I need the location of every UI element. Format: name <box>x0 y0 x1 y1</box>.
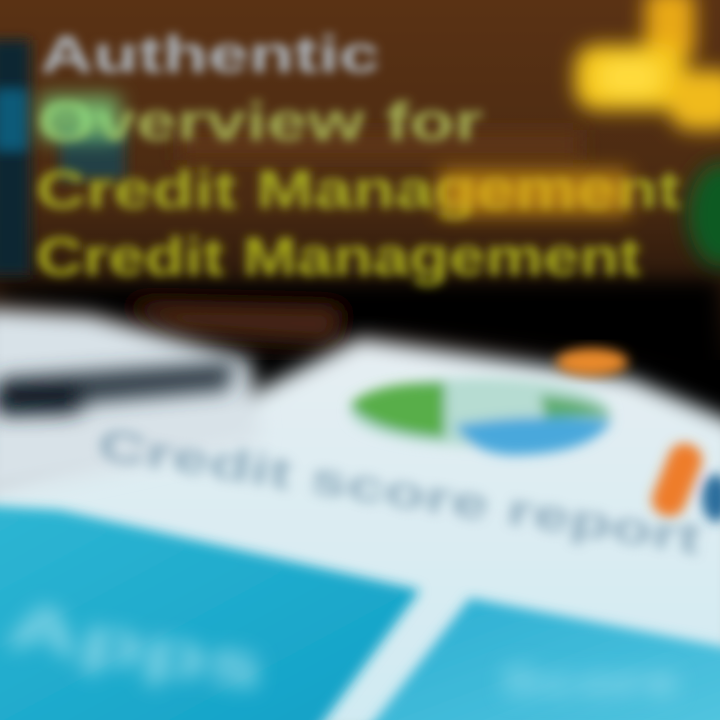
background: wooden desk <box>0 0 720 360</box>
heading line 3: Credit Management <box>36 160 681 220</box>
icon: yellow glow top right <box>575 0 720 130</box>
icon: orange and blue marker <box>647 438 720 522</box>
text block: lower-left cell label: Apps <box>2 591 270 704</box>
left blue edge <box>0 40 125 275</box>
text block: lower-right cell label: Score <box>500 660 680 704</box>
panel: main white document <box>0 338 720 720</box>
heading line 2: Overview for <box>38 92 483 152</box>
heading line 4: Credit Management <box>36 227 641 287</box>
dark band beneath heading <box>0 280 720 385</box>
heading line 1: Authentic <box>40 26 380 84</box>
orange tab <box>556 348 628 376</box>
heading colour accents <box>40 95 630 215</box>
title: blurred heading <box>36 26 681 287</box>
icon: green object right edge <box>688 163 720 267</box>
chart: green and blue pie <box>350 378 612 455</box>
paper: back-left document <box>0 308 260 500</box>
text block: blurred document label: Credit score report <box>94 420 705 564</box>
dark label on back-left document <box>0 362 235 416</box>
panel: lower-right cyan table cell <box>360 598 720 720</box>
panel: lower-left cyan table cell <box>0 505 420 720</box>
